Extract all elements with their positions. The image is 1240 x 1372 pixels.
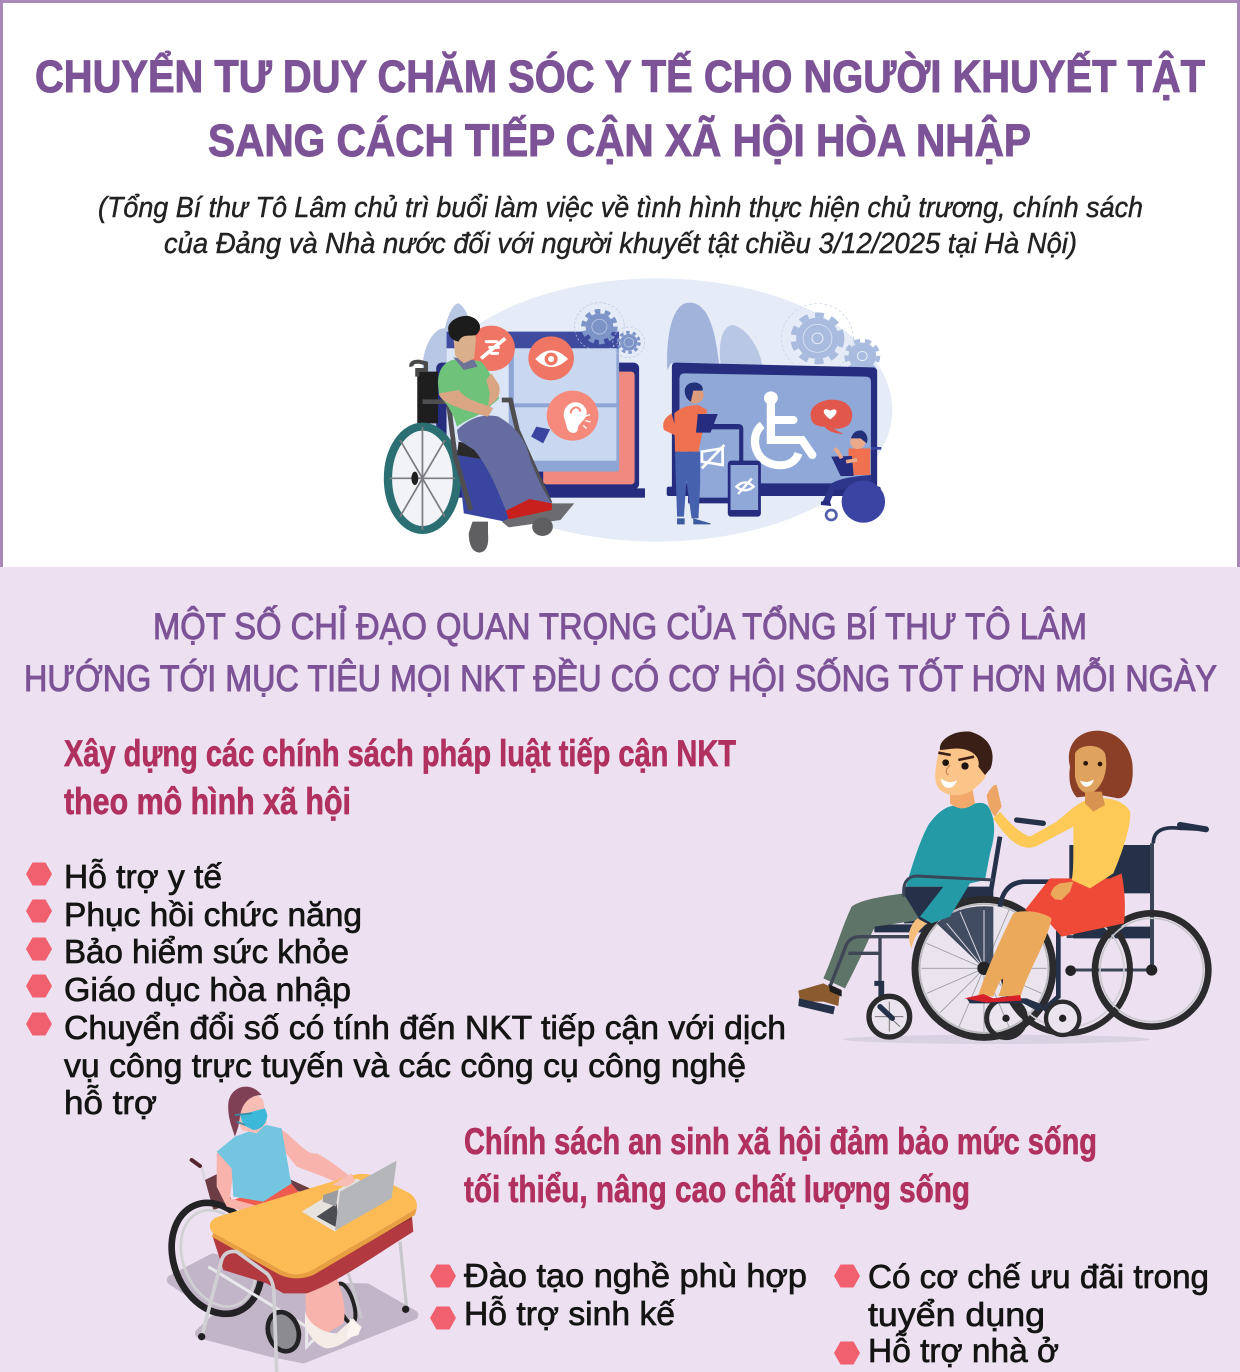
icon: eye: [528, 336, 574, 380]
tablet and phone: [688, 424, 761, 517]
subtitle: [98, 192, 1143, 260]
man with tablet: [663, 383, 718, 524]
bullet list: right column: Có cơ chế ưu đãi trong: [868, 1258, 1209, 1295]
section heading: MỘT SỐ CHỈ ĐẠO QUAN TRỌNG CỦA TỔNG BÍ THƯ TÔ LÂM: [153, 604, 1087, 647]
right leaves: [667, 303, 762, 370]
icon: heart bubble: [811, 400, 852, 434]
bullet list: right column: Hỗ trợ nhà ở: [868, 1332, 1059, 1369]
title: SANG CÁCH TIẾP CẬN XÃ HỘI HÒA NHẬP: [208, 115, 1031, 166]
bullet list: first group: [26, 858, 786, 1121]
bullet list: first group: vụ công trực tuyến và các công cụ công nghệ: [64, 1047, 746, 1084]
heading: social security: [464, 1121, 1097, 1210]
bullet list: first group: Bảo hiểm sức khỏe: [64, 933, 349, 970]
right monitor: [667, 363, 881, 496]
bullet list: right column: [834, 1258, 1209, 1369]
bullet list: left column: Đào tạo nghề phù hợp: [464, 1257, 807, 1294]
icon: ear: [547, 391, 598, 441]
illustration: accessibility technology: [388, 278, 892, 553]
panel: directives: [0, 567, 1240, 1372]
bullet list: first group: Hỗ trợ y tế: [64, 858, 222, 895]
bullet list: first group: Chuyển đổi số có tính đến NKT tiếp cận với dịch: [64, 1009, 786, 1046]
illustration: two wheelchair users: [798, 731, 1208, 1044]
child in wheelchair: [821, 430, 885, 523]
subtitle: của Đảng và Nhà nước đối với người khuyết tật chiều 3/12/2025 tại Hà Nội): [164, 228, 1077, 260]
bullet list: first group: Giáo dục hòa nhập: [64, 971, 351, 1008]
illustration: woman with laptop: [156, 1087, 417, 1372]
heading: social model policies: Xây dựng các chính sách pháp luật tiếp cận NKT: [64, 733, 736, 774]
gears: [782, 304, 878, 373]
left monitor: [428, 332, 645, 498]
subtitle: (Tổng Bí thư Tô Lâm chủ trì buổi làm việc về tình hình thực hiện chủ trương, chính sách: [98, 192, 1143, 224]
bullet list: left column: Hỗ trợ sinh kế: [464, 1295, 675, 1332]
icon: hearing off: [468, 326, 515, 371]
title: [35, 51, 1205, 166]
icon: wheelchair symbol: [755, 391, 812, 465]
woman in wheelchair: [964, 731, 1208, 1038]
bullet list: first group: hỗ trợ: [64, 1084, 157, 1121]
gears: [575, 303, 645, 358]
panel: header: [0, 0, 1240, 567]
heading: social model policies: [64, 733, 736, 822]
laptop: [302, 1161, 397, 1232]
bullet list: first group: Phục hồi chức năng: [64, 896, 362, 933]
heading: social security: tối thiểu, nâng cao chất lượng sống: [464, 1169, 970, 1210]
bullet list: right column: tuyển dụng: [868, 1296, 1045, 1333]
heading: social model policies: theo mô hình xã hội: [64, 781, 351, 822]
desk: [198, 1174, 417, 1372]
person: [217, 1087, 362, 1348]
section heading: [24, 604, 1217, 699]
bullet list: left column: [430, 1257, 807, 1332]
man in wheelchair: [798, 731, 1053, 1037]
person in wheelchair: [388, 316, 574, 553]
